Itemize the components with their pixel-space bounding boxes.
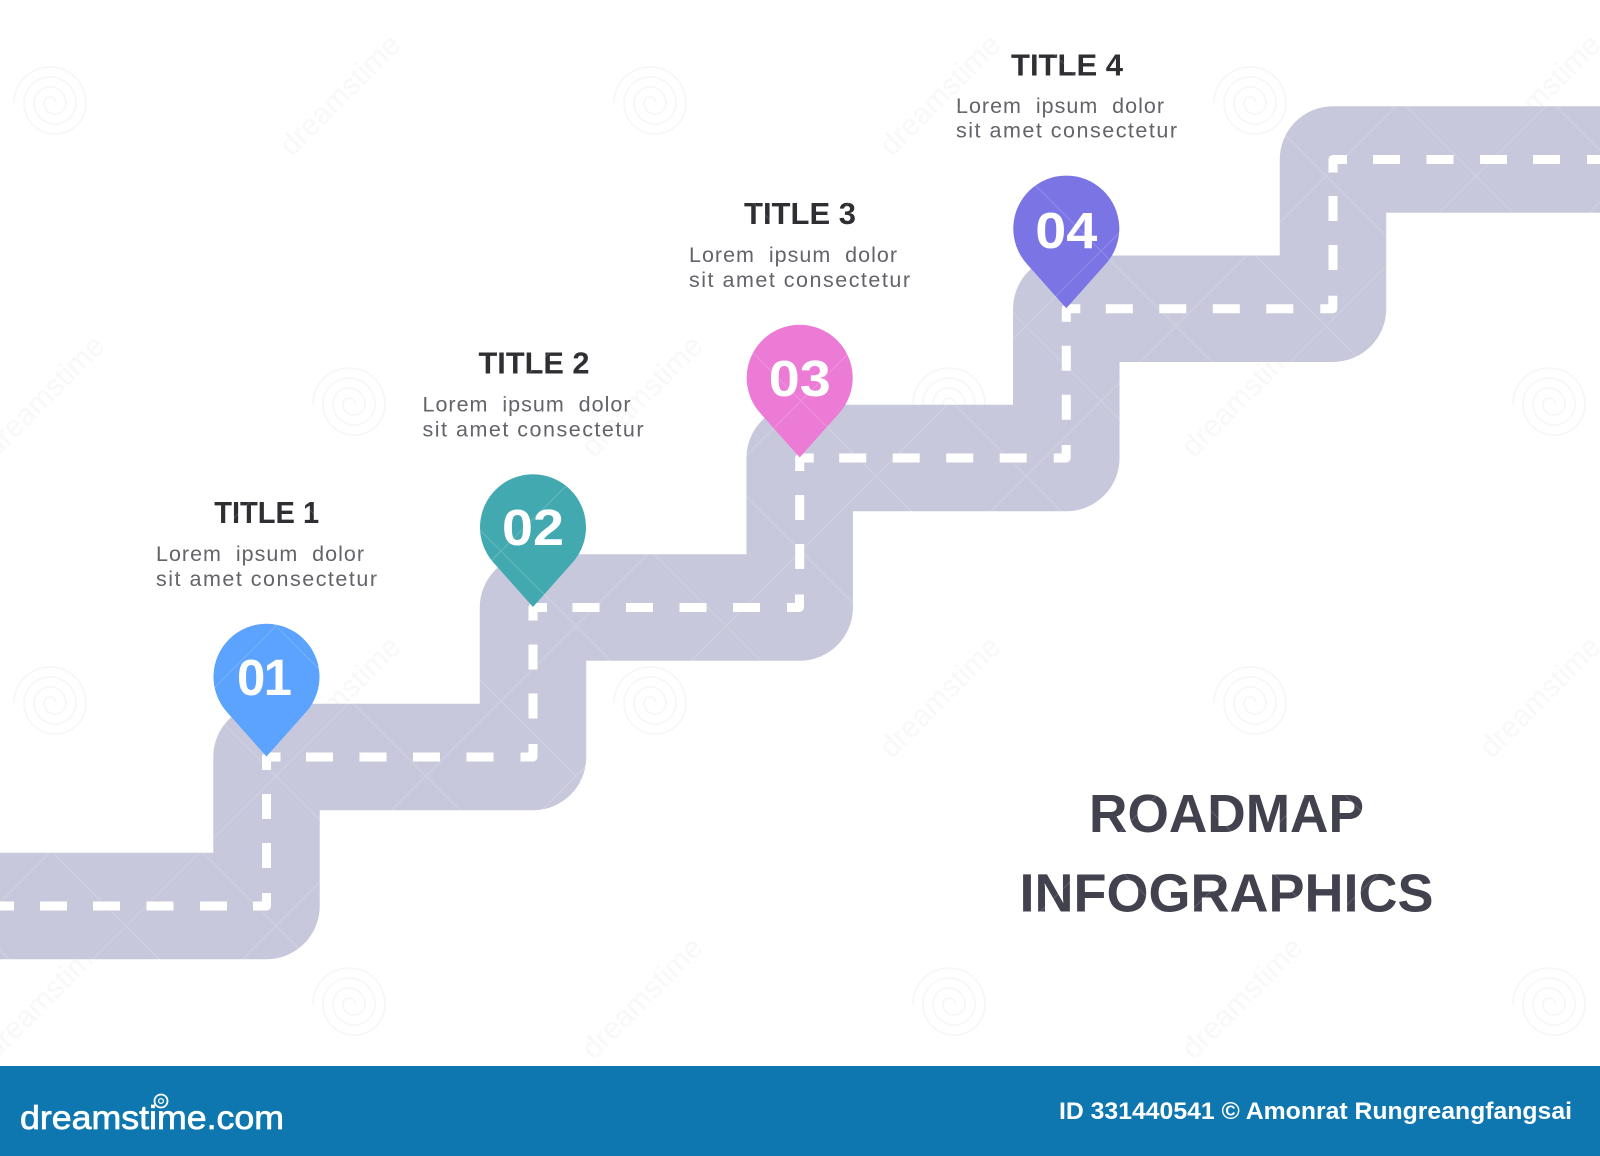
footer logo: dreamstime.com xyxy=(20,1099,284,1136)
watermark: diagonal text: dreamstime xyxy=(575,329,709,463)
description 4: Lorem ipsum dolor xyxy=(956,94,1164,118)
watermark: diagonal text: dreamstime xyxy=(873,630,1007,764)
step 1 xyxy=(156,495,377,756)
pin 03 xyxy=(747,325,853,458)
watermark: diagonal text: dreamstime xyxy=(1175,931,1309,1065)
main heading: INFOGRAPHICS xyxy=(1020,864,1434,924)
main heading: ROADMAP xyxy=(1089,784,1364,844)
footer credit: ID 331440541 © Amonrat Rungreangfangsai xyxy=(1059,1098,1572,1125)
description 2: sit amet consectetur xyxy=(422,418,644,442)
title 1: TITLE 1 xyxy=(214,495,319,530)
watermark: diagonal text: dreamstime xyxy=(873,28,1007,162)
pin 04 xyxy=(1013,176,1119,308)
description 4 xyxy=(956,94,1177,143)
watermark: diagonal text: dreamstime xyxy=(273,630,407,764)
title 4: TITLE 4 xyxy=(1011,48,1124,82)
main heading xyxy=(1020,784,1434,924)
title 2: TITLE 2 xyxy=(478,346,590,380)
step 2 xyxy=(422,346,644,607)
description 1 xyxy=(156,542,377,591)
description 3 xyxy=(689,243,910,292)
watermark: diagonal text: dreamstime xyxy=(273,28,407,162)
description 3: Lorem ipsum dolor xyxy=(689,243,897,267)
pin 01 xyxy=(214,624,320,756)
pin 01: 01 xyxy=(237,649,292,706)
footer bar xyxy=(0,1066,1600,1156)
description 2 xyxy=(422,393,644,442)
pin 04: 04 xyxy=(1035,202,1098,259)
road centre dashes xyxy=(0,160,1600,906)
description 1: sit amet consectetur xyxy=(156,567,377,591)
watermark: diagonal text: dreamstime xyxy=(575,931,709,1065)
pin 03: 03 xyxy=(769,350,831,407)
pin 02 xyxy=(480,474,586,607)
description 4: sit amet consectetur xyxy=(956,119,1177,143)
description 1: Lorem ipsum dolor xyxy=(156,542,364,566)
watermark: diagonal text: dreamstime xyxy=(1175,329,1309,463)
description 3: sit amet consectetur xyxy=(689,268,910,292)
title 3: TITLE 3 xyxy=(744,196,856,231)
step 4 xyxy=(956,48,1177,308)
road xyxy=(0,160,1600,906)
pin 02: 02 xyxy=(502,499,564,556)
description 2: Lorem ipsum dolor xyxy=(422,393,630,417)
step 3 xyxy=(689,196,910,458)
